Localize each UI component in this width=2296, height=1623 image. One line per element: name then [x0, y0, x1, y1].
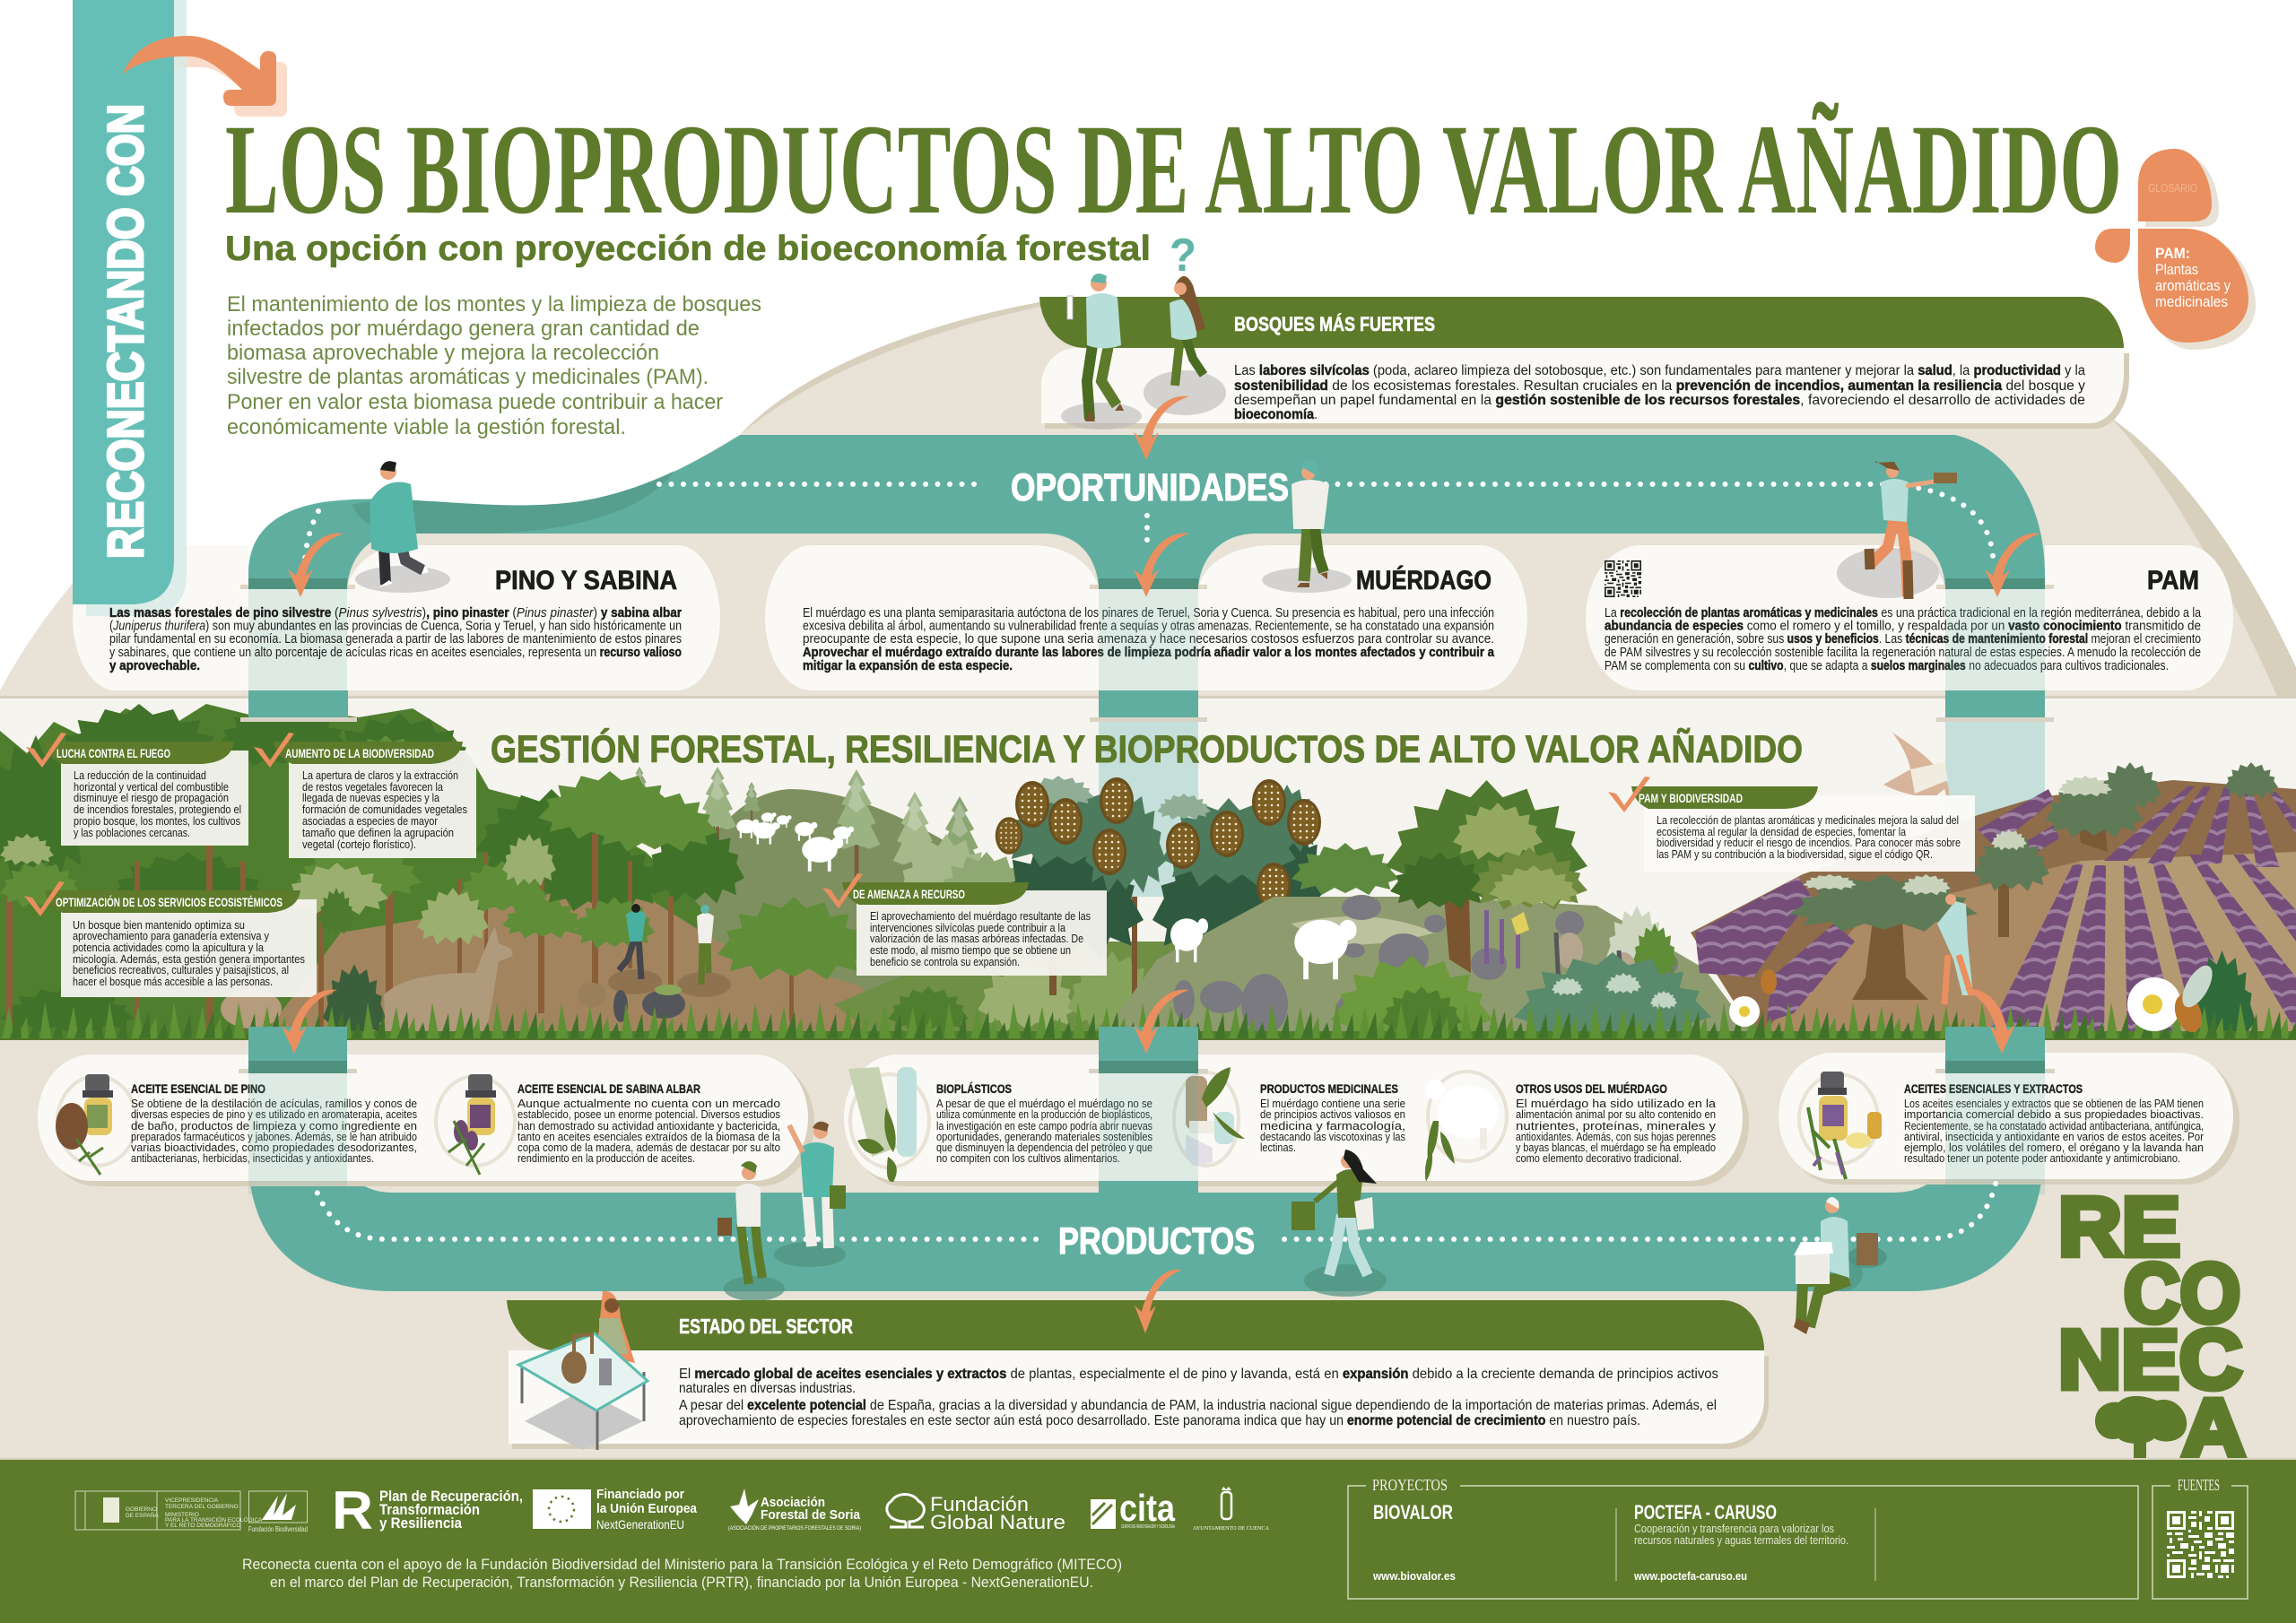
pine text: diversas especies de pino y es utilizado en aromaterapia, aceites — [131, 1107, 417, 1121]
callout: de amenaza a recurso — [822, 873, 1107, 976]
grass — [0, 1001, 2296, 1040]
card shadows — [43, 1058, 2239, 1186]
QR code fuentes — [2167, 1511, 2234, 1578]
text: intervenciones silvícolas puede contribuir a la — [870, 921, 1066, 934]
icon: pine oil bottle — [56, 1074, 136, 1175]
figure: woman with orange trousers — [1837, 461, 1957, 599]
logo: cita: CENTRO DE INVESTIGACIÓN Y TECNOLOGÍA — [1121, 1523, 1175, 1530]
panel: glosario — [2095, 149, 2256, 350]
project poctefa: recursos naturales y aguas termales del territorio. — [1634, 1533, 1848, 1547]
bioplastics text: que disminuyen la dependencia del petróleo y que — [936, 1141, 1152, 1154]
icon: medicinal products — [1174, 1067, 1245, 1166]
bioplastics text: utiliza comúnmente en la producción de bioplásticos, — [936, 1107, 1152, 1121]
otros usos text: antioxidantes. Además, con sus hojas perennes — [1516, 1130, 1716, 1143]
logo: gobierno de españa: MINISTERIO — [165, 1512, 199, 1518]
PAM text: PAM se complementa con su cultivo, que se adapta a suelos marginales no adecuados para cultivos tradicionales. — [1605, 659, 2169, 673]
logo: plan de recuperación — [332, 1480, 523, 1541]
glosario definition: medicinales — [2155, 294, 2228, 310]
undergrowth below de amenaza callout — [834, 942, 1175, 1040]
intro paragraph: económicamente viable la gestión forestal. — [227, 415, 626, 439]
logo: cita: cita — [1119, 1487, 1176, 1529]
bosques text: Las labores silvícolas (poda, aclareo limpieza del sotobosque, etc.) son fundamentales para mantener y mejorar la salud, la productividad y la — [1234, 363, 2085, 378]
text: ecosistema al regular la densidad de especies, fomentar la — [1657, 825, 1907, 838]
arrows: oportunidades to cards — [288, 534, 2040, 597]
text: beneficio se controla su expansión. — [870, 955, 1020, 968]
title: DE AMENAZA A RECURSO — [853, 888, 965, 901]
logo: unión europea: la Unión Europea — [596, 1502, 698, 1516]
text — [1657, 813, 1961, 861]
intro paragraph: El mantenimiento de los montes y la limpieza de bosques — [227, 292, 761, 317]
funding note: Reconecta cuenta con el apoyo de la Fundación Biodiversidad del Ministerio para la Transición Ecológica y el Reto Demográfico (MITECO) — [242, 1556, 1122, 1573]
meadow — [1112, 780, 1758, 1048]
PAM heading: PAM — [2147, 566, 2199, 595]
logo: fundación global nature: Fundación — [930, 1493, 1029, 1515]
funding note — [242, 1556, 1122, 1591]
bosques heading: BOSQUES MÁS FUERTES — [1234, 313, 1435, 335]
otros usos text: y bayas blancas, el muérdago se ha empleado — [1516, 1141, 1716, 1154]
figures: two walkers on top panel — [1061, 273, 1226, 430]
pino text: y aprovechable. — [109, 659, 200, 673]
otros usos text: nutrientes, proteínas, minerales y — [1516, 1119, 1717, 1133]
sector text — [679, 1367, 1718, 1428]
figure: seated man with box — [1794, 1197, 1887, 1334]
callout: aumento de la biodiversidad — [254, 733, 476, 858]
subtitle: Una opción con proyección de bioeconomía forestal — [225, 230, 1151, 268]
intro paragraph: biomasa aprovechable y mejora la recolección — [227, 341, 659, 365]
logo: plan de recuperación: R — [332, 1480, 373, 1541]
logo: unión europea: NextGenerationEU — [596, 1517, 684, 1532]
fuentes label: FUENTES — [2178, 1476, 2220, 1494]
text: micología. Además, esta gestión genera importantes — [73, 952, 305, 966]
PAM text — [1605, 606, 2202, 673]
glosario definition: PAM: — [2155, 246, 2190, 262]
PAM text: abundancia de especies como el romero y el tomillo, y respaldada por un vasto conocimiento transmitido de — [1605, 619, 2201, 633]
project poctefa: POCTEFA - CARUSO — [1634, 1501, 1777, 1523]
sector text: aprovechamiento de especies forestales en este sector aún está poco desarrollado. Este panorama indica que hay un enorme potencial de crecimiento en nuestro país. — [679, 1413, 1640, 1428]
text: beneficios recreativos, culturales y paisajísticos, al — [73, 963, 289, 976]
aceites text: Los aceites esenciales y extractos que se obtienen de las PAM tienen — [1904, 1097, 2204, 1110]
text: tamaño que definen la agrupación — [302, 826, 454, 839]
project biovalor: www.biovalor.es — [1372, 1569, 1456, 1583]
muérdago text: excesiva debilita al árbol, aumentando su vulnerabilidad frente a sequías y otras amenazas. Recientemente, se ha constatado una expansión — [803, 619, 1494, 633]
beige dome background — [0, 300, 2296, 708]
project poctefa — [1633, 1501, 1848, 1583]
text: potencia actividades como la apicultura y la — [73, 941, 265, 954]
sabina title: ACEITE ESENCIAL DE SABINA ALBAR — [517, 1082, 700, 1096]
sabina text: rendimiento en la producción de aceites. — [517, 1151, 695, 1165]
arrow: top panel to oportunidades — [1134, 396, 1189, 460]
text: horizontal y vertical del combustible — [74, 780, 229, 794]
sabina text: establecido, posee un enorme potencial. Diversos estudios — [517, 1107, 780, 1121]
lavender field — [1691, 762, 2296, 1055]
text — [870, 909, 1091, 968]
logo: RECONECTA: RE — [2058, 1180, 2180, 1273]
muérdago text: Aprovechar el muérdago extraído durante las labores de limpieza podría añadir valor a los montes afectados y contribuir a — [803, 646, 1495, 660]
sector text: naturales en diversas industrias. — [679, 1381, 856, 1396]
medicinal title: PRODUCTOS MEDICINALES — [1260, 1082, 1398, 1096]
aceites text: antiviral, insecticida y antioxidante en varios de estos aceites. Por — [1904, 1130, 2205, 1143]
callout: PAM y biodiversidad — [1608, 777, 1975, 872]
text: de restos vegetales favorecen la — [302, 780, 444, 794]
title: LUCHA CONTRA EL FUEGO — [57, 747, 170, 760]
logo: plan de recuperación: Plan de Recuperación, — [379, 1488, 523, 1505]
logo: ayuntamiento de cuenca: AYUNTAMIENTO DE CUENCA — [1193, 1525, 1269, 1532]
project biovalor: BIOVALOR — [1373, 1501, 1453, 1523]
logo: fundación global nature — [887, 1493, 1065, 1533]
logo: RECONECTA: CO — [2124, 1246, 2240, 1340]
logo: fundación biodiversidad — [248, 1491, 308, 1533]
logo: asociación forestal de soria: Asociación — [761, 1495, 825, 1510]
sabina text: tanto en aceites esenciales extraídos de la biomasa de la — [517, 1130, 781, 1143]
text: llegada de nuevas especies y la — [302, 791, 440, 804]
aceites text: ejemplo, los volátiles del romero, el orégano y la lavanda han — [1904, 1141, 2204, 1154]
left forest — [0, 704, 897, 1042]
icon: sheep with mistletoe — [1425, 1072, 1507, 1182]
icon: oil bottles and herbs — [1799, 1072, 1882, 1179]
card: PAM — [1586, 545, 2233, 690]
intro paragraph: silvestre de plantas aromáticas y medicinales (PAM). — [227, 365, 709, 389]
sector text: El mercado global de aceites esenciales y extractos de plantas, especialmente el de pino y lavanda, está en expansión debido a la creciente demanda de principios activos — [679, 1367, 1718, 1382]
productos teal band — [248, 1027, 2043, 1291]
title: AUMENTO DE LA BIODIVERSIDAD — [285, 747, 434, 760]
bosques text: desempeñan un papel fundamental en la gestión sostenible de los recursos forestales , favoreciendo el desarrollo de actividades de — [1234, 393, 2085, 408]
arrows: forest to product cards — [282, 989, 2015, 1054]
panel: bosques más fuertes — [1039, 297, 2129, 429]
sidebar with vertical title — [73, 0, 187, 616]
medicinal text: medicina y farmacología, — [1260, 1119, 1405, 1133]
figure: table with distillation and person — [518, 1291, 648, 1450]
QR code PAM — [1605, 560, 1641, 597]
icon: bioplastics — [848, 1067, 929, 1182]
sabina text: copa como de la madera, además de destacar por su alto — [517, 1141, 780, 1154]
logo: cita — [1091, 1487, 1176, 1530]
bosques text: sostenibilidad de los ecosistemas forestales. Resultan cruciales en la prevención de incendios, aumentan la resiliencia del bosque y — [1234, 378, 2085, 394]
bioplastics title: BIOPLÁSTICOS — [936, 1082, 1012, 1096]
mistletoe trees — [991, 776, 1327, 1004]
medicinal text: El muérdago contiene una serie — [1260, 1097, 1405, 1110]
pine text: varias bioactividades, como propiedades desodorizantes, — [131, 1141, 417, 1154]
daisy and bee — [1729, 960, 2218, 1036]
medicinal text — [1260, 1097, 1405, 1154]
pino text: pilar fundamental en su economía. La biomasa generada a partir de las labores de mantenimiento de estos pinares — [109, 632, 682, 647]
logo: gobierno de españa: GOBIERNO — [126, 1506, 157, 1513]
otros usos text: alimentación animal por su alto contenido en — [1516, 1107, 1716, 1121]
pine text: preparados farmacéuticos y jabones. Además, se le han atribuido — [131, 1130, 417, 1143]
card: pino y sabina — [73, 545, 720, 690]
bioplastics text: A pesar de que el muérdago el muérdago no se — [936, 1097, 1152, 1110]
band label: oportunidades: OPORTUNIDADES — [1011, 466, 1289, 509]
title: OPTIMIZACIÓN DE LOS SERVICIOS ECOSISTÉMICOS — [56, 896, 283, 909]
text: valorización de las masas arbóreas infectadas. De — [870, 932, 1083, 945]
glosario definition: Plantas — [2155, 262, 2198, 278]
pino text: y sabinares, que contiene un alto porcentaje de acículas ricas en aceites esenciales, representa un recurso valioso — [109, 646, 682, 660]
pino text: Las masas forestales de pino silvestre (Pinus sylvestris), pino pinaster (Pinus pinaster) y sabina albar — [109, 606, 682, 621]
logo: ayuntamiento de cuenca — [1193, 1487, 1269, 1532]
project biovalor — [1372, 1501, 1456, 1583]
logo: gobierno de españa: PARA LA TRANSICIÓN ECOLÓGICA — [165, 1515, 263, 1523]
logo: RECONECTA: NEC — [2058, 1313, 2242, 1406]
intro paragraph: infectados por muérdago genera gran cantidad de — [227, 317, 700, 341]
text: hacer el bosque más accesible a las personas. — [73, 975, 273, 988]
logo: fundación global nature: Global Nature — [930, 1511, 1065, 1533]
bioplastics text: oportunidades, generando materiales sostenibles — [936, 1130, 1152, 1143]
bosques text: bioeconomía. — [1234, 407, 1318, 422]
muérdago text: preocupante de esta especie, lo que supone una seria amenaza y hace necesarios costosos esfuerzos para controlar su avance. — [803, 632, 1494, 647]
bosques text — [1234, 363, 2085, 422]
icon: sabina oil bottle — [436, 1074, 515, 1175]
aceites title: ACEITES ESENCIALES Y EXTRACTOS — [1904, 1082, 2083, 1096]
glosario definition — [2155, 246, 2231, 310]
text: El aprovechamiento del muérdago resultante de las — [870, 909, 1091, 923]
figure: man in teal sweater — [355, 461, 450, 593]
translucent column overlays on cards — [240, 578, 2054, 690]
sabina text — [517, 1097, 781, 1165]
title: PAM Y BIODIVERSIDAD — [1639, 792, 1743, 805]
text — [302, 768, 467, 851]
logo: unión europea — [533, 1488, 698, 1532]
medicinal text: lectinas. — [1260, 1141, 1296, 1154]
otros usos title: OTROS USOS DEL MUÉRDAGO — [1516, 1082, 1667, 1096]
muérdago text: mitigar la expansión de esta especie. — [803, 659, 1013, 673]
medicinal text: de principios activos valiosos en — [1260, 1107, 1405, 1121]
dotted route bottom — [314, 1184, 1996, 1239]
otros usos text: El muérdago ha sido utilizado en la — [1516, 1097, 1717, 1110]
aceites text: importancia comercial debido a sus propiedades bioactivas. — [1904, 1107, 2204, 1121]
text: La reducción de la continuidad — [74, 768, 206, 782]
card: aceites esenciales y extractos — [1779, 1053, 2233, 1179]
logo: gobierno de españa: TERCERA DEL GOBIERNO — [165, 1504, 239, 1510]
text: este modo, al mismo tiempo que se obtiene un — [870, 943, 1071, 957]
muérdago text: El muérdago es una planta semiparasitaria autóctona de los pinares de Teruel, Soria y Cuenca. Su presencia es habitual, pero una infección — [803, 606, 1494, 621]
logo: plan de recuperación: y Resiliencia — [379, 1515, 463, 1532]
hikers — [608, 904, 731, 997]
card: aceites pino y sabina — [38, 1055, 808, 1181]
logo: gobierno de españa: DE ESPAÑA — [126, 1511, 159, 1519]
deer — [384, 927, 513, 1040]
text: propio bosque, los montes, los cultivos — [74, 814, 240, 828]
logo: asociación forestal de soria: (ASOCIACIÓN DE PROPIETARIOS FORESTALES DE SORIA) — [728, 1525, 861, 1532]
logo: asociación forestal de soria: Forestal de Soria — [761, 1507, 861, 1523]
pine text — [131, 1097, 417, 1165]
band label: productos: PRODUCTOS — [1058, 1219, 1255, 1262]
muérdago heading: MUÉRDAGO — [1356, 565, 1492, 595]
pino heading: PINO Y SABINA — [495, 566, 677, 595]
logo: unión europea: Financiado por — [596, 1488, 684, 1502]
pino text — [109, 606, 682, 673]
logo: RECONECTA: A — [2181, 1382, 2246, 1475]
muérdago text — [803, 606, 1495, 673]
aceites text: Recientemente, se ha constatado actividad antibacteriana, antifúngica, — [1904, 1119, 2204, 1133]
illustration: forest scene — [0, 696, 2296, 1055]
intro paragraph — [227, 292, 761, 439]
pine text: Se obtiene de la destilación de acículas, ramillos y conos de — [131, 1097, 417, 1110]
PAM text: La recolección de plantas aromáticas y medicinales es una práctica tradicional en la región mediterránea, debido a la — [1605, 606, 2202, 621]
sabina text: han demostrado su actividad antioxidante y bactericida, — [517, 1119, 780, 1133]
logo: fundación biodiversidad: Fundación Biodiversidad — [248, 1525, 308, 1533]
arrow: title curved arrow shadow — [134, 47, 287, 117]
mushrooms and rocks — [578, 983, 685, 1022]
sidebar with vertical title: RECONECTANDO CON — [97, 104, 153, 559]
callout: lucha contra el fuego — [26, 733, 248, 846]
text: aprovechamiento para ganadería extensiva y — [73, 929, 269, 942]
text: y las poblaciones cercanas. — [74, 826, 190, 839]
text: biodiversidad y reducir el riesgo de incendios. Para conocer más sobre — [1657, 836, 1961, 849]
medicinal text: destacando las viscotoxinas y las — [1260, 1130, 1405, 1143]
logo: asociación forestal de soria — [728, 1488, 861, 1532]
sabina text: Aunque actualmente no cuenta con un mercado — [517, 1097, 780, 1110]
logo: gobierno de españa: VICEPRESIDENCIA — [165, 1497, 219, 1504]
logo: gobierno de españa: Y EL RETO DEMOGRÁFICO — [165, 1521, 240, 1529]
callout: optimización — [24, 881, 317, 997]
card: muérdago — [765, 545, 1527, 690]
lower beige section — [0, 1040, 2296, 1462]
sector heading: ESTADO DEL SECTOR — [679, 1315, 853, 1338]
glosario label: GLOSARIO — [2148, 181, 2197, 195]
figures: shoppers left — [718, 1122, 846, 1301]
bioplastics text — [936, 1097, 1152, 1165]
pino text: (Juniperus thurifera) son muy abundantes en las provincias de Cuenca, Soria y Teruel, y han sido históricamente un — [109, 619, 682, 633]
box: fuentes — [2152, 1476, 2248, 1599]
text: Un bosque bien mantenido optimiza su — [73, 918, 245, 932]
pine text: antibacterianas, herbicidas, insecticidas y antioxidantes. — [131, 1151, 374, 1165]
oportunidades teal band — [248, 435, 2045, 592]
project poctefa: Cooperación y transferencia para valorizar los — [1634, 1522, 1834, 1535]
figure: woman in white shirt — [1262, 460, 1352, 593]
text: formación de comunidades vegetales — [302, 803, 467, 816]
dotted route top — [305, 484, 1993, 560]
text: de incendios forestales, protegiendo el — [74, 803, 241, 816]
logo: RECONECTA — [2058, 1180, 2246, 1475]
lower columns overlays — [239, 1027, 2055, 1194]
text — [74, 768, 241, 839]
footer — [0, 1458, 2296, 1623]
glosario definition: aromáticas y — [2155, 278, 2231, 294]
text: La apertura de claros y la extracción — [302, 768, 458, 782]
PAM text: generación en generación, sobre sus usos y beneficios. Las técnicas de mantenimiento forestal mejoran el crecimiento — [1605, 632, 2201, 647]
aceites text — [1904, 1097, 2205, 1165]
text — [73, 918, 305, 988]
intro paragraph: Poner en valor esta biomasa puede contribuir a hacer — [227, 390, 723, 414]
far hill with pines and sheep — [619, 767, 1036, 1013]
bioplastics text: la investigación en este campo podría abrir nuevas — [936, 1119, 1152, 1133]
aceites text: resultado tener un potente poder antioxidante y antimicrobiano. — [1904, 1151, 2180, 1165]
pine title: ACEITE ESENCIAL DE PINO — [131, 1082, 265, 1096]
text: asociadas a especies de mayor — [302, 814, 439, 828]
panel: estado del sector — [507, 1300, 1769, 1449]
proyectos label: PROYECTOS — [1372, 1476, 1448, 1494]
bioplastics text: no compiten con los cultivos alimentarios. — [936, 1151, 1120, 1165]
funding note: en el marco del Plan de Recuperación, Transformación y Resiliencia (PRTR), financiado por la Unión Europea - NextGenerationEU. — [270, 1574, 1093, 1591]
text: La recolección de plantas aromáticas y medicinales mejora la salud del — [1657, 813, 1959, 827]
otros usos text — [1516, 1097, 1717, 1165]
box: proyectos — [1348, 1476, 2138, 1599]
text: las PAM y su contribución a la biodiversidad, sigue el código QR. — [1657, 847, 1933, 861]
bird — [1883, 733, 1952, 809]
arrow: title arrow front — [123, 36, 276, 106]
logo tree — [2095, 1396, 2187, 1462]
card: bioplásticos, medicinales y otros usos — [844, 1055, 1743, 1182]
logo: gobierno de españa — [75, 1491, 263, 1530]
question mark: ? — [1170, 230, 1196, 282]
text: disminuye el riesgo de propagación — [74, 791, 229, 804]
pine text: de baño, productos de limpieza y como ingrediente en — [131, 1119, 417, 1133]
figure: woman with bags — [1292, 1150, 1387, 1297]
otros usos text: como elemento decorativo tradicional. — [1516, 1151, 1682, 1165]
column tops in forest band — [240, 690, 2054, 722]
arrow: productos to sector — [1135, 1270, 1182, 1333]
logo: plan de recuperación: Transformación — [379, 1502, 480, 1518]
sector text: A pesar del excelente potencial de España, gracias a la diversidad y abundancia de PAM, la industria nacional sigue dependiendo de la importación de materias primas. Además, el — [679, 1398, 1717, 1413]
forest heading: GESTIÓN FORESTAL, RESILIENCIA Y BIOPRODUCTOS DE ALTO VALOR AÑADIDO — [491, 727, 1803, 771]
project poctefa: www.poctefa-caruso.eu — [1633, 1569, 1747, 1583]
text: vegetal (cortejo florístico). — [302, 838, 416, 851]
